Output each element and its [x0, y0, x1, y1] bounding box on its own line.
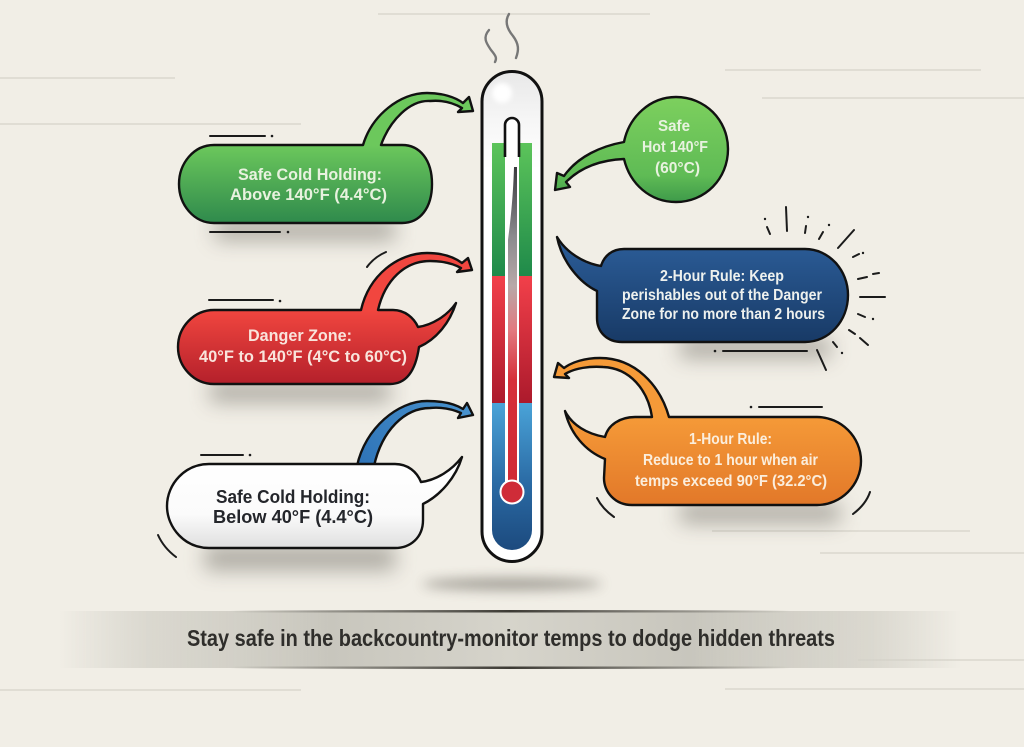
text: Safe [658, 118, 690, 135]
text: Safe Cold Holding: [216, 487, 370, 507]
blue cold band [492, 403, 532, 550]
thermometer [482, 72, 542, 562]
red danger band [492, 276, 532, 403]
callout: safe cold holding above: Above 140°F (4.4°C) [230, 185, 387, 204]
text: Danger Zone: [248, 326, 352, 345]
callout: safe hot: Hot 140°F [642, 139, 708, 156]
green safe band [492, 143, 532, 276]
text: Safe Cold Holding: [238, 165, 382, 184]
channel cap [505, 118, 519, 157]
callout: safe hot [555, 97, 728, 202]
glass tube [482, 72, 542, 562]
glass highlight [492, 83, 512, 103]
inner channel [505, 157, 519, 483]
accent marks [158, 136, 885, 557]
arrow: cold holding [357, 401, 473, 466]
callout: 2-hour rule: Zone for no more than 2 hours [622, 306, 825, 323]
callout: danger zone [178, 253, 472, 384]
mercury column [508, 167, 517, 482]
thermometer floor shadow [422, 578, 602, 590]
callout: 1-hour rule: Reduce to 1 hour when air [643, 452, 818, 469]
caption text: Stay safe in the backcountry-monitor temps to dodge hidden threats [187, 625, 835, 651]
text: 2-Hour Rule: Keep [660, 268, 784, 285]
callout: 1-hour rule: temps exceed 90°F (32.2°C) [635, 473, 827, 490]
drop shadows [205, 220, 840, 570]
callout: safe cold holding below: Below 40°F (4.4°C) [213, 507, 373, 527]
callout: safe cold holding below [167, 457, 462, 548]
callout: safe hot: (60°C) [655, 160, 700, 177]
mercury bulb [500, 480, 524, 504]
callout: danger zone: 40°F to 140°F (4°C to 60°C) [199, 347, 407, 366]
callout: 1-hour rule [554, 358, 861, 505]
steam [485, 14, 518, 62]
text: 1-Hour Rule: [689, 431, 772, 448]
callout: 2-hour rule: perishables out of the Danger [622, 287, 822, 304]
callout: safe cold holding above [179, 93, 473, 223]
callout: 2-hour rule [557, 237, 848, 342]
caption band [60, 610, 960, 669]
channel outline [505, 118, 519, 157]
